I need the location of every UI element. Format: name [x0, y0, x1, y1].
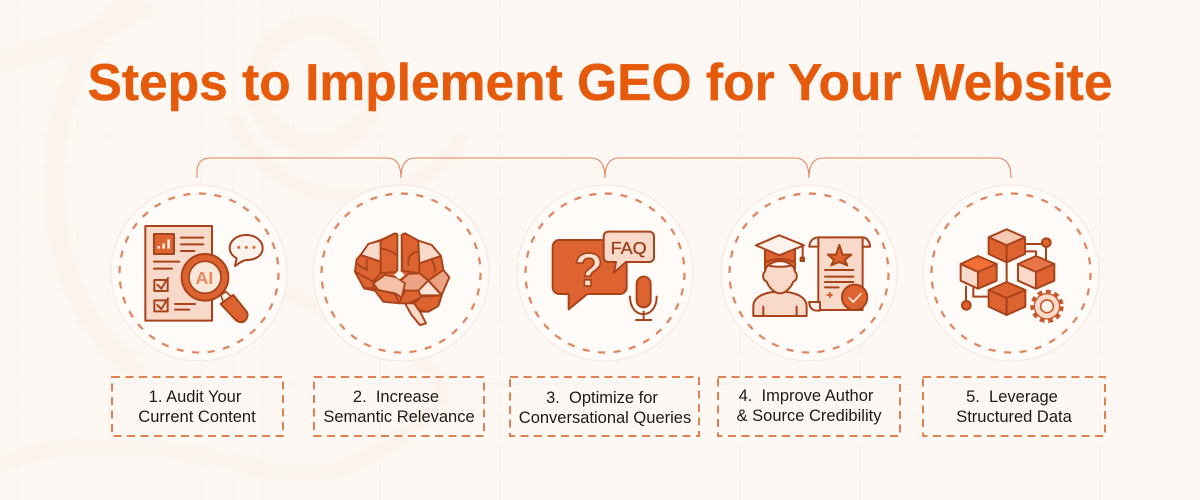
- label: step 3: 3. Optimize for: [546, 389, 658, 407]
- label: step 1: [112, 377, 283, 436]
- label: step 4: [718, 377, 900, 436]
- connector bracket: [197, 158, 1011, 178]
- step 2: increase semantic relevance: [313, 185, 489, 436]
- label: step 5: Structured Data: [956, 408, 1073, 426]
- label: step 2: 2. Increase: [353, 388, 439, 406]
- icon: AI audit document: [145, 226, 263, 322]
- label: step 3: [510, 377, 699, 436]
- circle: step 2: [313, 185, 489, 361]
- circle: step 4: [721, 185, 897, 361]
- icon: data cubes and gear: [961, 229, 1061, 321]
- circle: step 1: [111, 185, 287, 361]
- icon: brain: [355, 233, 449, 325]
- label: step 3: Conversational Queries: [519, 409, 691, 427]
- label: step 5: 5. Leverage: [966, 388, 1058, 406]
- circle: step 3: [517, 185, 693, 361]
- icon: graduate and certificate: [753, 235, 870, 316]
- step 5: leverage structured data: [923, 185, 1105, 436]
- icon: FAQ chat and microphone: ?: [574, 244, 603, 297]
- icon: AI audit document: AI: [195, 268, 213, 288]
- icon: FAQ chat and microphone: FAQ: [611, 238, 647, 258]
- icon: FAQ chat and microphone: [553, 232, 657, 320]
- label: step 1: 1. Audit Your: [149, 388, 242, 406]
- step 4: improve author and source credibility: [718, 185, 900, 436]
- label: step 5: [923, 377, 1105, 436]
- label: step 1: Current Content: [138, 408, 256, 426]
- label: step 4: 4. Improve Author: [739, 387, 874, 405]
- circle: step 5: [923, 185, 1099, 361]
- title: Steps to Implement GEO for Your Website: [88, 54, 1112, 112]
- step 1: audit your current content: [111, 185, 287, 436]
- label: step 4: & Source Credibility: [737, 407, 882, 425]
- label: step 2: Semantic Relevance: [323, 408, 475, 426]
- label: step 2: [314, 377, 484, 436]
- step 3: optimize for conversational queries: [510, 185, 699, 436]
